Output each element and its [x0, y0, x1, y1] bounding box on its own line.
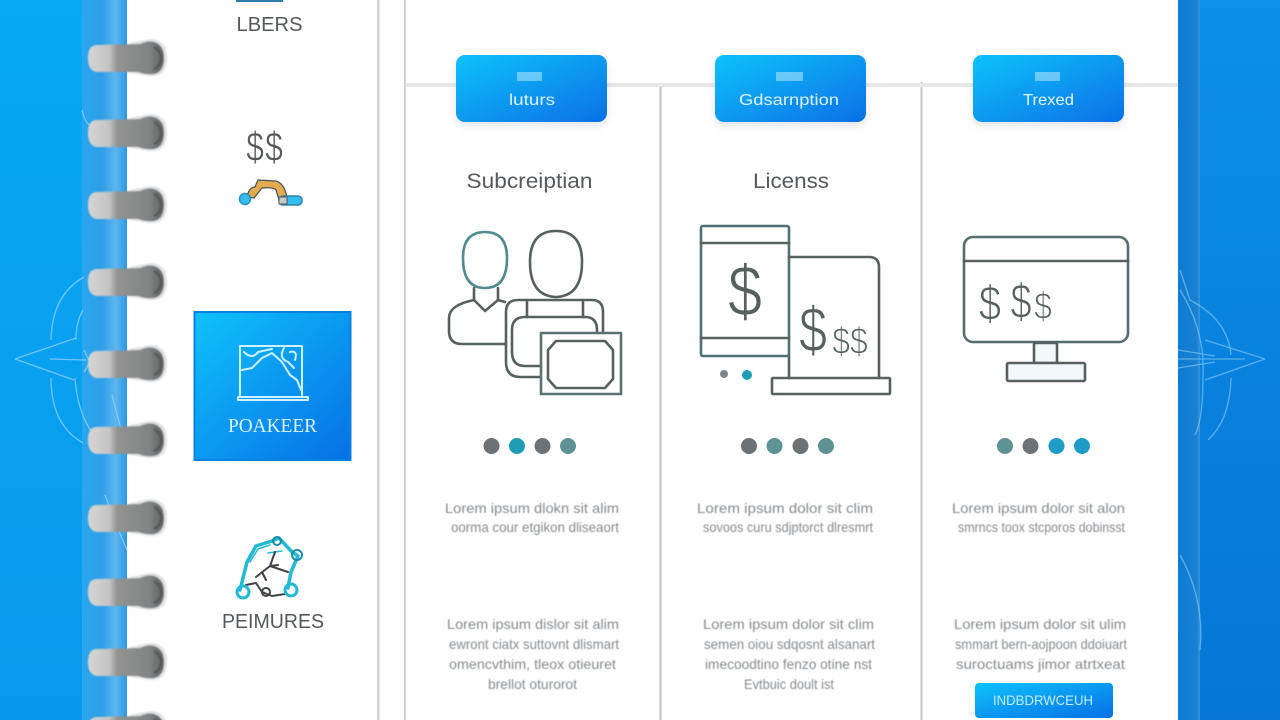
header button 1: [456, 55, 607, 122]
page edge and column dividers: [377, 0, 1178, 720]
header button 2: [715, 55, 866, 122]
text block 1b: ewront ciatx suttovnt dlismart: [449, 636, 619, 652]
icon: monitor with dollars: $: [1034, 285, 1052, 328]
text block 3b: Lorem ipsum dolor sit ulim: [954, 616, 1126, 632]
selected sidebar tile: POAKEER: [228, 415, 318, 437]
column 3: [952, 55, 1128, 718]
sidebar icon: dollars and pipe: [240, 123, 302, 205]
icon: people and card: [449, 231, 621, 394]
column 2: [697, 55, 890, 692]
text block 3a: Lorem ipsum dolor sit alon: [952, 500, 1125, 516]
status dots: [741, 438, 834, 454]
text block 2b: Lorem ipsum dolor sit clim: [703, 616, 874, 632]
icon: landscape frame: [238, 346, 308, 400]
icon: license documents with dollars: $: [799, 295, 827, 366]
icon: monitor with dollars: $: [1010, 274, 1032, 329]
text block 2b: Evtbuic doult ist: [744, 676, 834, 692]
header button 2: Gdsarnption: [739, 92, 839, 109]
text block 3b: suroctuams jimor atrtxeat: [956, 656, 1125, 672]
text block 1a: oorma cour etgikon dliseaort: [451, 519, 619, 535]
icon: monitor with dollars: $: [979, 277, 1001, 331]
text block 1a: Lorem ipsum dlokn sit alim: [445, 500, 619, 516]
sidebar icon: dollars and pipe: $: [265, 123, 283, 170]
icon: license documents with dollars: $$: [832, 320, 868, 363]
call to action button: [975, 683, 1113, 718]
right cover: [1200, 0, 1280, 720]
sidebar item: labels: [236, 0, 302, 36]
header button 3: [973, 55, 1124, 122]
text block 2b: semen oiou sdqosnt alsanart: [704, 636, 875, 652]
icon: monitor with dollars: [964, 237, 1128, 381]
text block 1a: [445, 500, 619, 535]
call to action button: INDBDRWCEUH: [993, 692, 1093, 708]
selected sidebar tile: [194, 312, 350, 460]
text block 3b: [954, 616, 1127, 672]
spiral binding rings: [88, 39, 167, 720]
left cover: [0, 0, 84, 720]
text block 2b: [703, 616, 875, 692]
right compass decoration: [1178, 270, 1265, 650]
text block 1b: brellot oturorot: [488, 676, 577, 692]
left compass decoration: [15, 110, 127, 550]
sidebar item: labels: LBERS: [236, 14, 302, 36]
header button 1: luturs: [509, 92, 555, 109]
header button 3: Trexed: [1023, 92, 1074, 109]
text block 3a: [952, 500, 1125, 535]
text block 1b: Lorem ipsum dislor sit alim: [447, 616, 619, 632]
sidebar icon: dollars and pipe: $: [246, 123, 264, 170]
left spine strip: [82, 0, 127, 720]
text block 3b: smmart bern-aojpoon ddoiuart: [955, 636, 1127, 652]
status dots: [484, 438, 576, 454]
text block 1b: omencvthim, tleox otieuret: [449, 656, 616, 672]
text block 3a: smrncs toox stcporos dobinsst: [958, 519, 1125, 535]
status dots: [997, 438, 1090, 454]
text block 2a: sovoos curu sdjptorct dlresmrt: [703, 519, 873, 535]
text block 2a: [697, 500, 873, 535]
text block 1b: [447, 616, 619, 692]
text block 2a: Lorem ipsum dolor sit clim: [697, 500, 873, 516]
sidebar label: peimures: PEIMURES: [222, 611, 324, 633]
column 1: [445, 55, 621, 692]
text block 2b: imecoodtino fenzo otine nst: [705, 656, 872, 672]
right spine strip: [1178, 0, 1200, 720]
column 2 title: Licenss: [753, 170, 829, 193]
sidebar icon: robotic network: [237, 537, 302, 598]
icon: license documents with dollars: $: [728, 251, 762, 332]
column 1 title: Subcreiptian: [466, 170, 592, 193]
icon: license documents with dollars: [701, 226, 890, 394]
